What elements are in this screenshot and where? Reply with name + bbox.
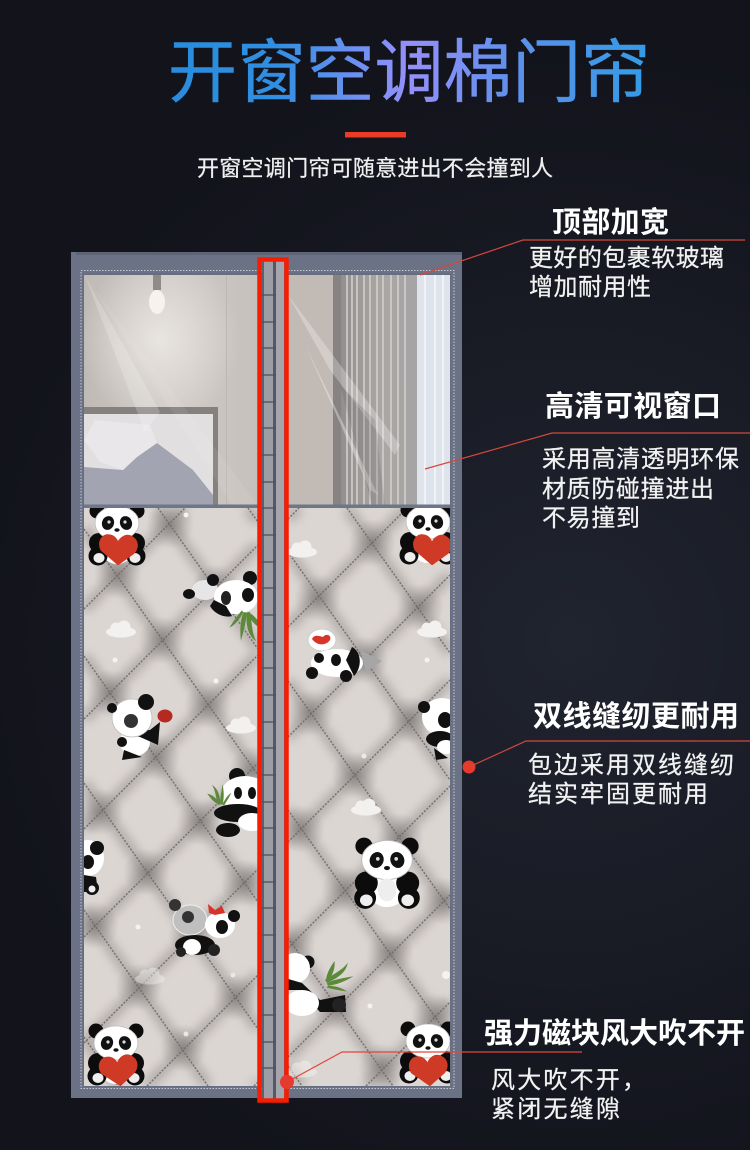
door curtain illustration (71, 252, 468, 1100)
front facing panda (354, 838, 420, 909)
left window scene (84, 275, 258, 504)
clouds (287, 540, 450, 1078)
leader line (425, 433, 750, 469)
panda couple with bow (169, 899, 240, 957)
panda holding rose (107, 694, 172, 760)
leader line (469, 741, 750, 767)
callout text (491, 1067, 646, 1123)
callout text: 材质防碰撞进出 (542, 476, 714, 503)
panda with heart, top left (88, 504, 146, 566)
lying panda with thought bubble (306, 629, 382, 682)
leader line (420, 240, 745, 275)
clear window panel (80, 255, 450, 508)
callout heading: 强力磁块风大吹不开 (484, 1017, 745, 1050)
quilted panda panel (71, 501, 468, 1091)
marker dot (462, 760, 476, 774)
glass reflection (288, 295, 400, 455)
marker dot (280, 1075, 294, 1089)
panda cut at left edge (84, 840, 104, 895)
callout heading: 双线缝纫更耐用 (533, 700, 739, 733)
callout text (542, 446, 739, 532)
ceiling lamp (149, 275, 165, 314)
left quilt (84, 508, 258, 1086)
framed mountain picture (84, 407, 218, 505)
callout: top widened (420, 206, 745, 301)
callout text (528, 752, 734, 808)
leader line (287, 1052, 582, 1082)
callout text: 增加耐用性 (529, 274, 651, 301)
central magnetic strip (262, 261, 284, 1099)
clouds (106, 512, 256, 1036)
red accent bar (345, 132, 406, 138)
window bottom border (84, 504, 450, 508)
glass reflection (86, 278, 160, 414)
callout heading: 顶部加宽 (552, 206, 669, 239)
side panda with bamboo (288, 953, 354, 1016)
callout text: 紧闭无缝隙 (491, 1096, 620, 1123)
callout: HD window (425, 390, 750, 532)
curtain outer frame (71, 252, 462, 1098)
panda with heart, top right (400, 508, 450, 566)
right panel pandas and clouds (280, 502, 462, 1088)
left panel pandas and clouds (84, 508, 258, 1086)
right window scene (288, 275, 450, 505)
panda with heart, bottom left (88, 1024, 144, 1089)
callout: double stitching (462, 700, 750, 808)
panda cut at right edge (418, 698, 450, 760)
title: 开窗空调棉门帘 (168, 34, 650, 111)
callout text (529, 245, 724, 301)
callout text: 包边采用双线缝纫 (528, 752, 734, 779)
callout text: 结实牢固更耐用 (528, 781, 708, 808)
panda with heart, bottom right (400, 1022, 450, 1086)
subtitle: 开窗空调门帘可随意进出不会撞到人 (197, 156, 553, 181)
red highlight box (260, 260, 286, 1100)
callout text: 不易撞到 (542, 505, 640, 532)
right quilt (288, 508, 450, 1086)
callout text: 风大吹不开， (491, 1067, 646, 1094)
callout text: 更好的包裹软玻璃 (529, 245, 724, 272)
callout heading: 高清可视窗口 (545, 390, 721, 423)
callout text: 采用高清透明环保 (542, 446, 739, 473)
lying panda with bamboo (183, 571, 258, 642)
panda with bamboo, centre (207, 768, 258, 837)
callout: strong magnets (280, 1017, 745, 1123)
